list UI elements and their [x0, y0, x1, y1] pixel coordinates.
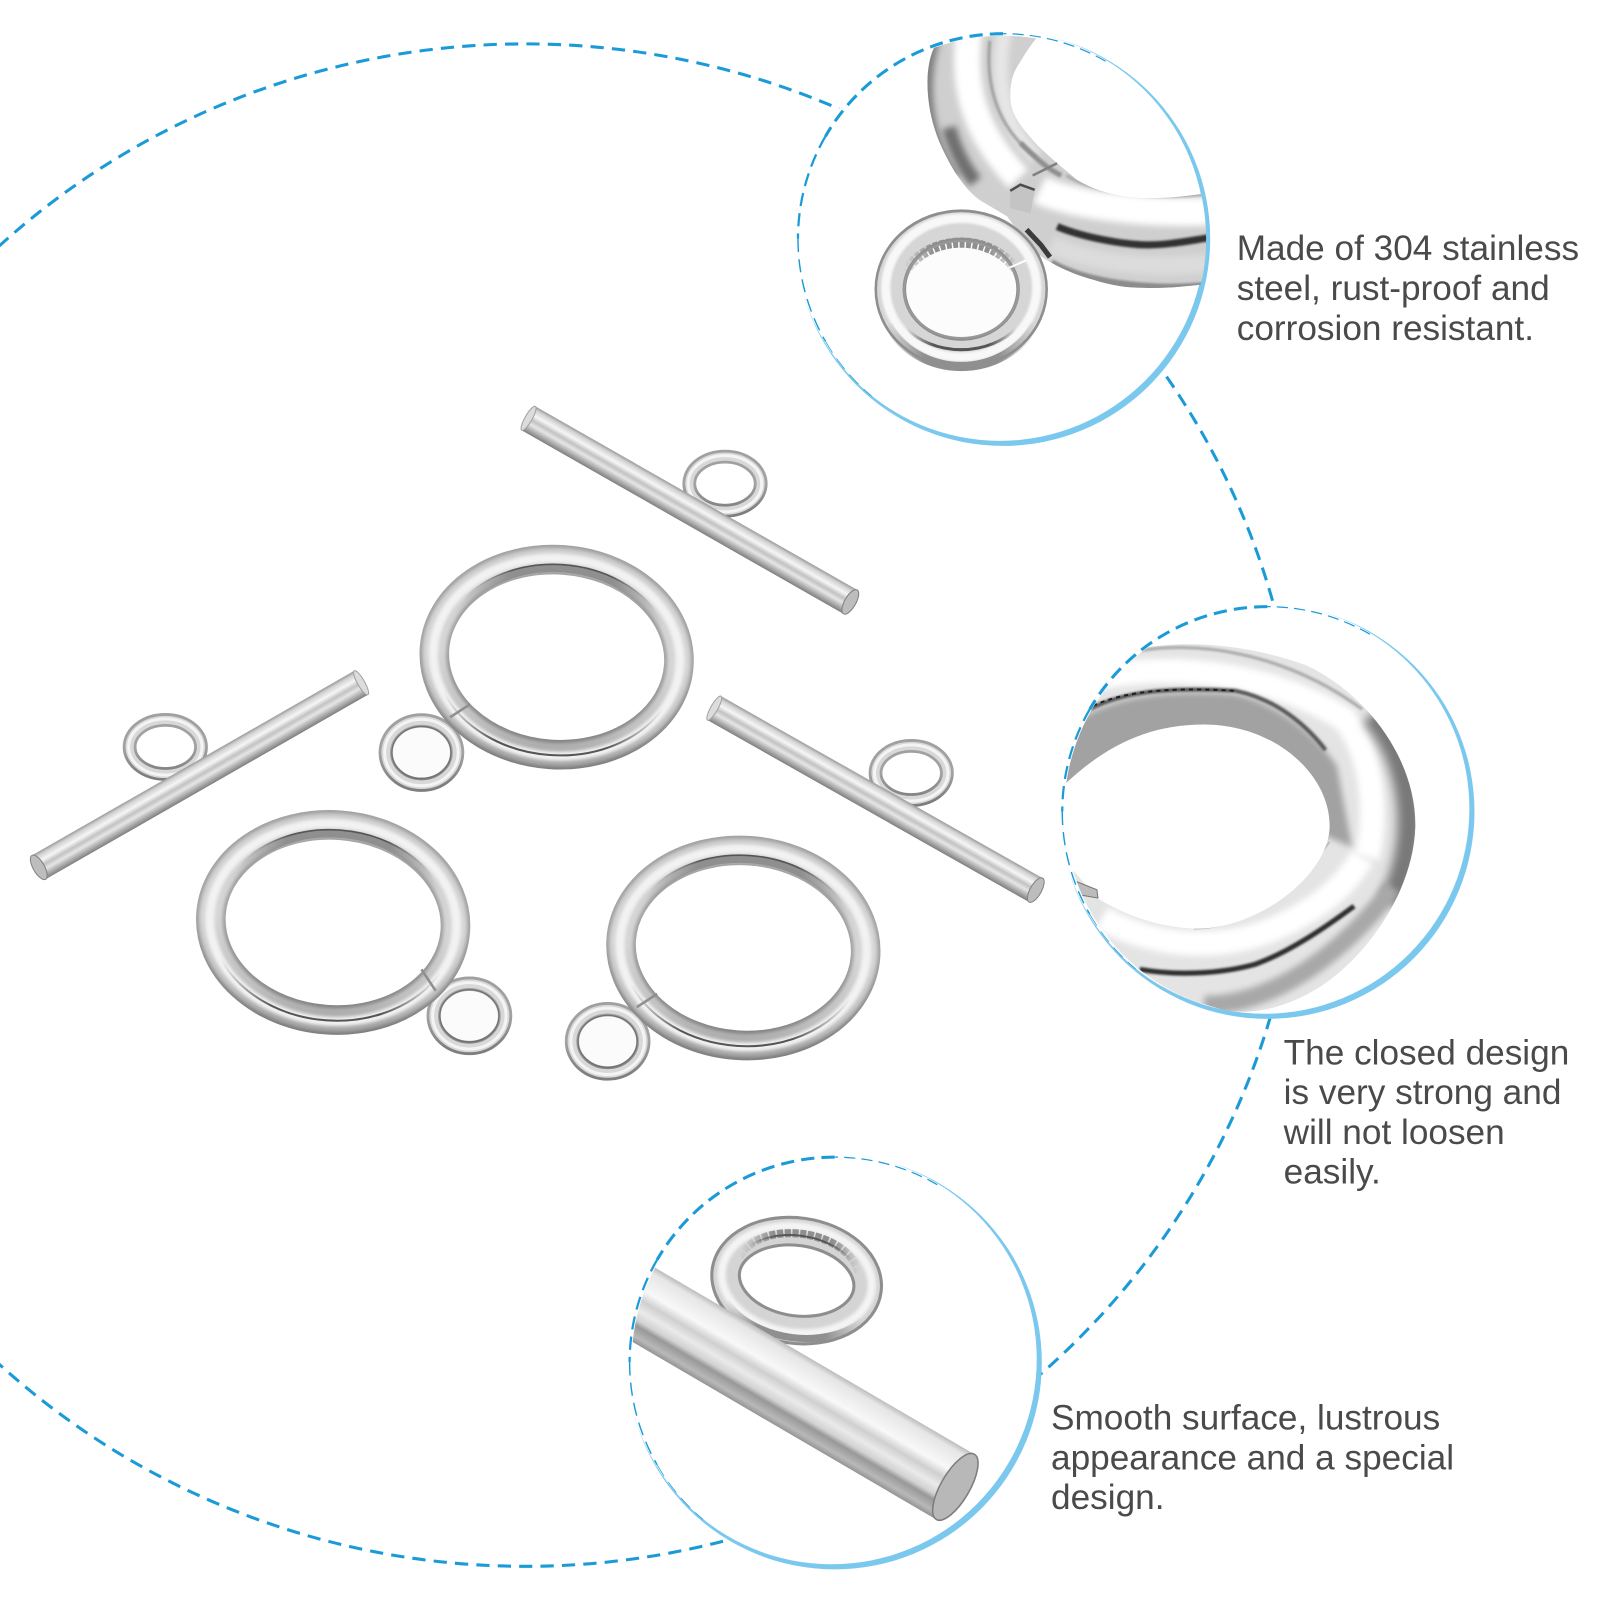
- caption: surface: design.: [1051, 1478, 1164, 1517]
- toggle ring: lower right: [571, 841, 873, 1074]
- product group: toggle clasps: [27, 405, 1047, 1074]
- caption: material: steel, rust-proof and: [1237, 269, 1550, 308]
- bar end close-up: [632, 1268, 979, 1522]
- caption: closed design: easily.: [1284, 1153, 1381, 1192]
- toggle bar: right: [704, 694, 1047, 905]
- caption: closed design: will not loosen: [1283, 1113, 1505, 1152]
- caption: surface: Smooth surface, lustrous: [1051, 1399, 1440, 1438]
- caption: closed design: The closed design: [1284, 1033, 1569, 1072]
- caption: material: Made of 304 stainless: [1237, 229, 1579, 268]
- small loop close-up: [886, 218, 1037, 367]
- ring joint: [1010, 163, 1057, 257]
- toggle bar: top: [519, 405, 862, 617]
- toggle ring: top centre: [385, 550, 687, 786]
- toggle bar: left: [27, 669, 371, 882]
- caption: closed design: is very strong and: [1284, 1073, 1561, 1112]
- caption: surface: appearance and a special: [1051, 1438, 1454, 1477]
- dashed connector loop: [0, 44, 1301, 1566]
- caption: material: corrosion resistant.: [1237, 309, 1534, 348]
- ring segment close-up: [927, 26, 1209, 288]
- callout circle 3: bar end detail: [628, 1156, 1042, 1570]
- toggle ring: lower left: [203, 815, 506, 1049]
- callout circle 2: closed ring detail: [1051, 604, 1474, 1019]
- small loop close-up: [714, 1217, 879, 1348]
- ring close-up: [1051, 644, 1415, 1012]
- callout circle 1: ring and loop detail: [795, 26, 1210, 446]
